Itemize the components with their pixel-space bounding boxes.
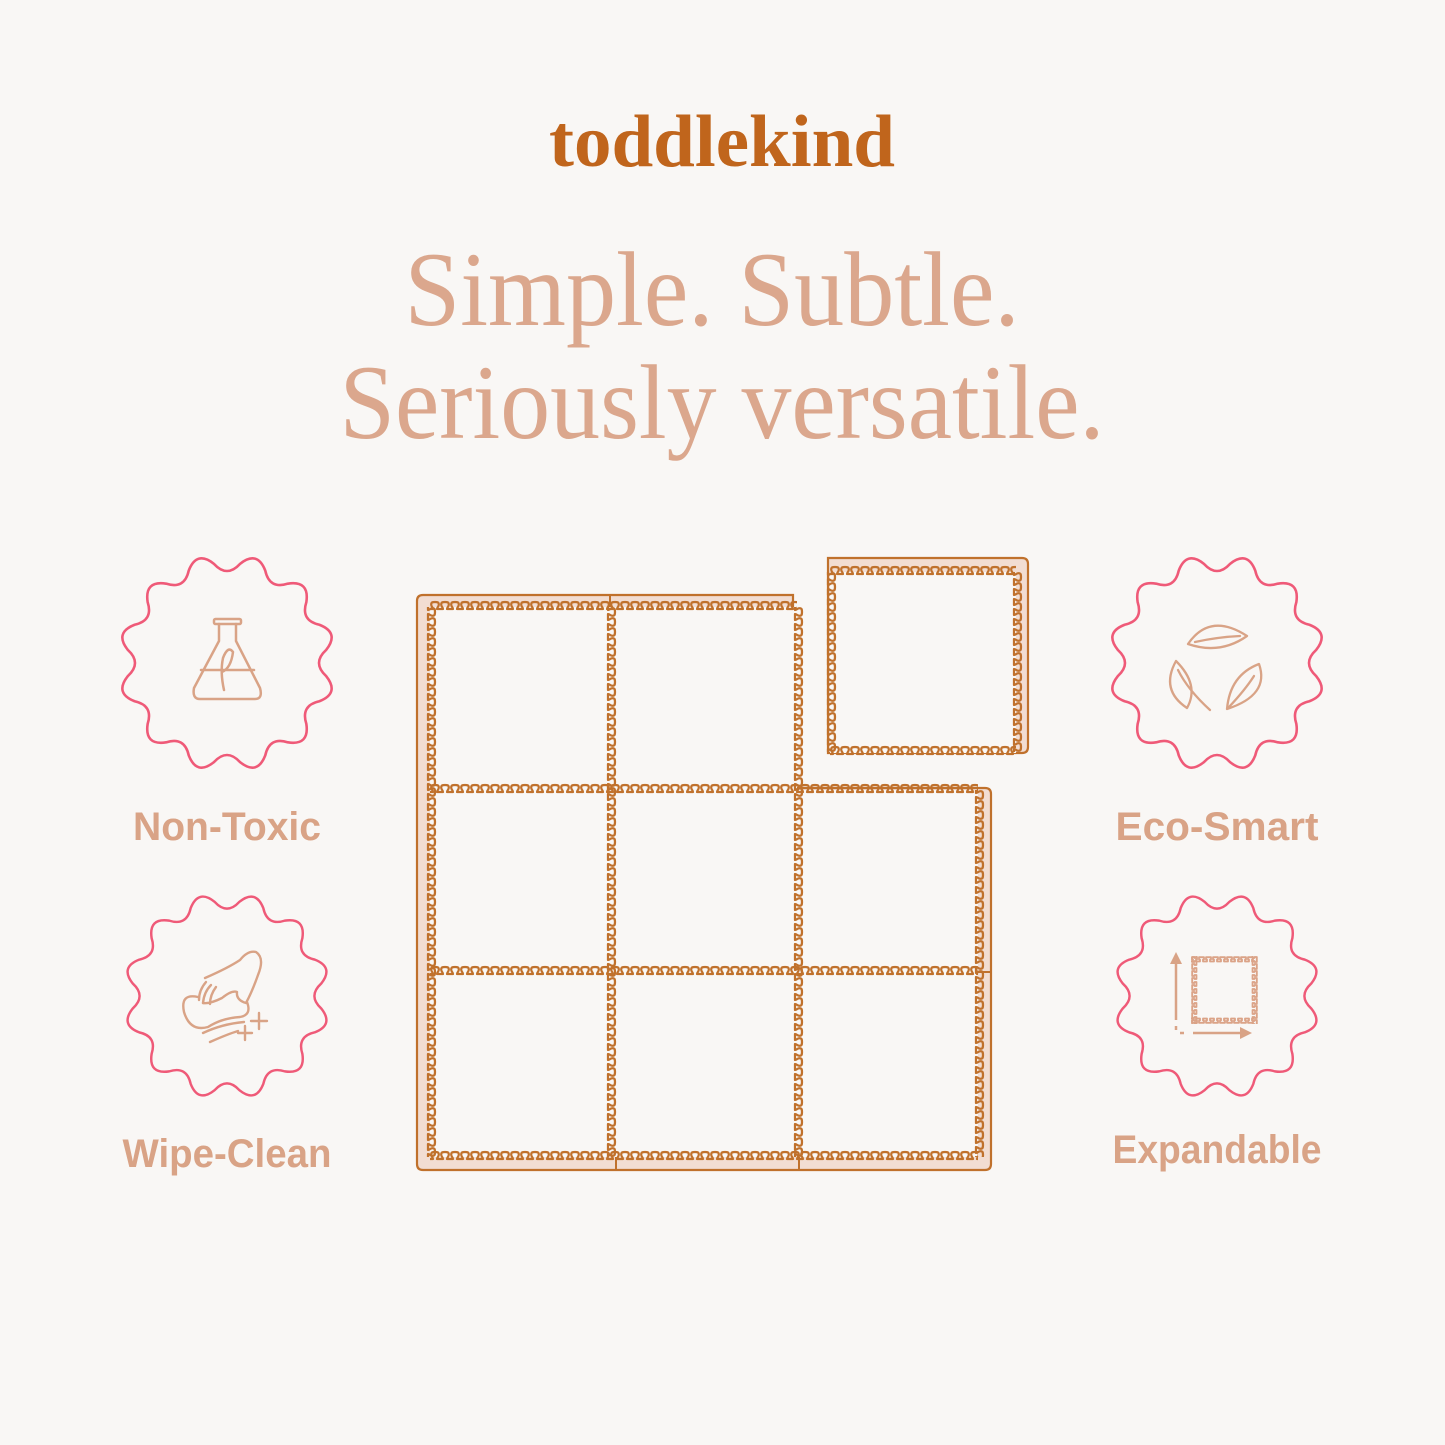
headline xyxy=(340,231,1104,461)
play mat illustration xyxy=(417,595,991,1170)
single loose tile xyxy=(825,558,1028,757)
badge: Eco-Smart xyxy=(1085,531,1349,795)
label: Non-Toxic: Non-Toxic xyxy=(133,805,321,849)
icon: leaves xyxy=(1170,626,1261,710)
mat border strip xyxy=(417,595,991,1170)
badge: Expandable xyxy=(1091,870,1343,1122)
logo: toddlekind: toddlekind xyxy=(549,101,895,183)
icon: flask xyxy=(194,619,261,699)
badge: Non-Toxic xyxy=(95,531,359,795)
badge: Wipe-Clean xyxy=(101,870,353,1122)
headline: Simple. Subtle. xyxy=(404,231,1020,348)
label: Expandable: Expandable xyxy=(1112,1128,1322,1172)
icon: hand wiping xyxy=(183,952,267,1042)
tile seams xyxy=(425,600,985,1162)
icon: expanding tile xyxy=(1170,952,1258,1039)
headline: Seriously versatile. xyxy=(340,344,1104,461)
label: Eco-Smart: Eco-Smart xyxy=(1116,805,1318,849)
label: Wipe-Clean: Wipe-Clean xyxy=(122,1132,332,1176)
